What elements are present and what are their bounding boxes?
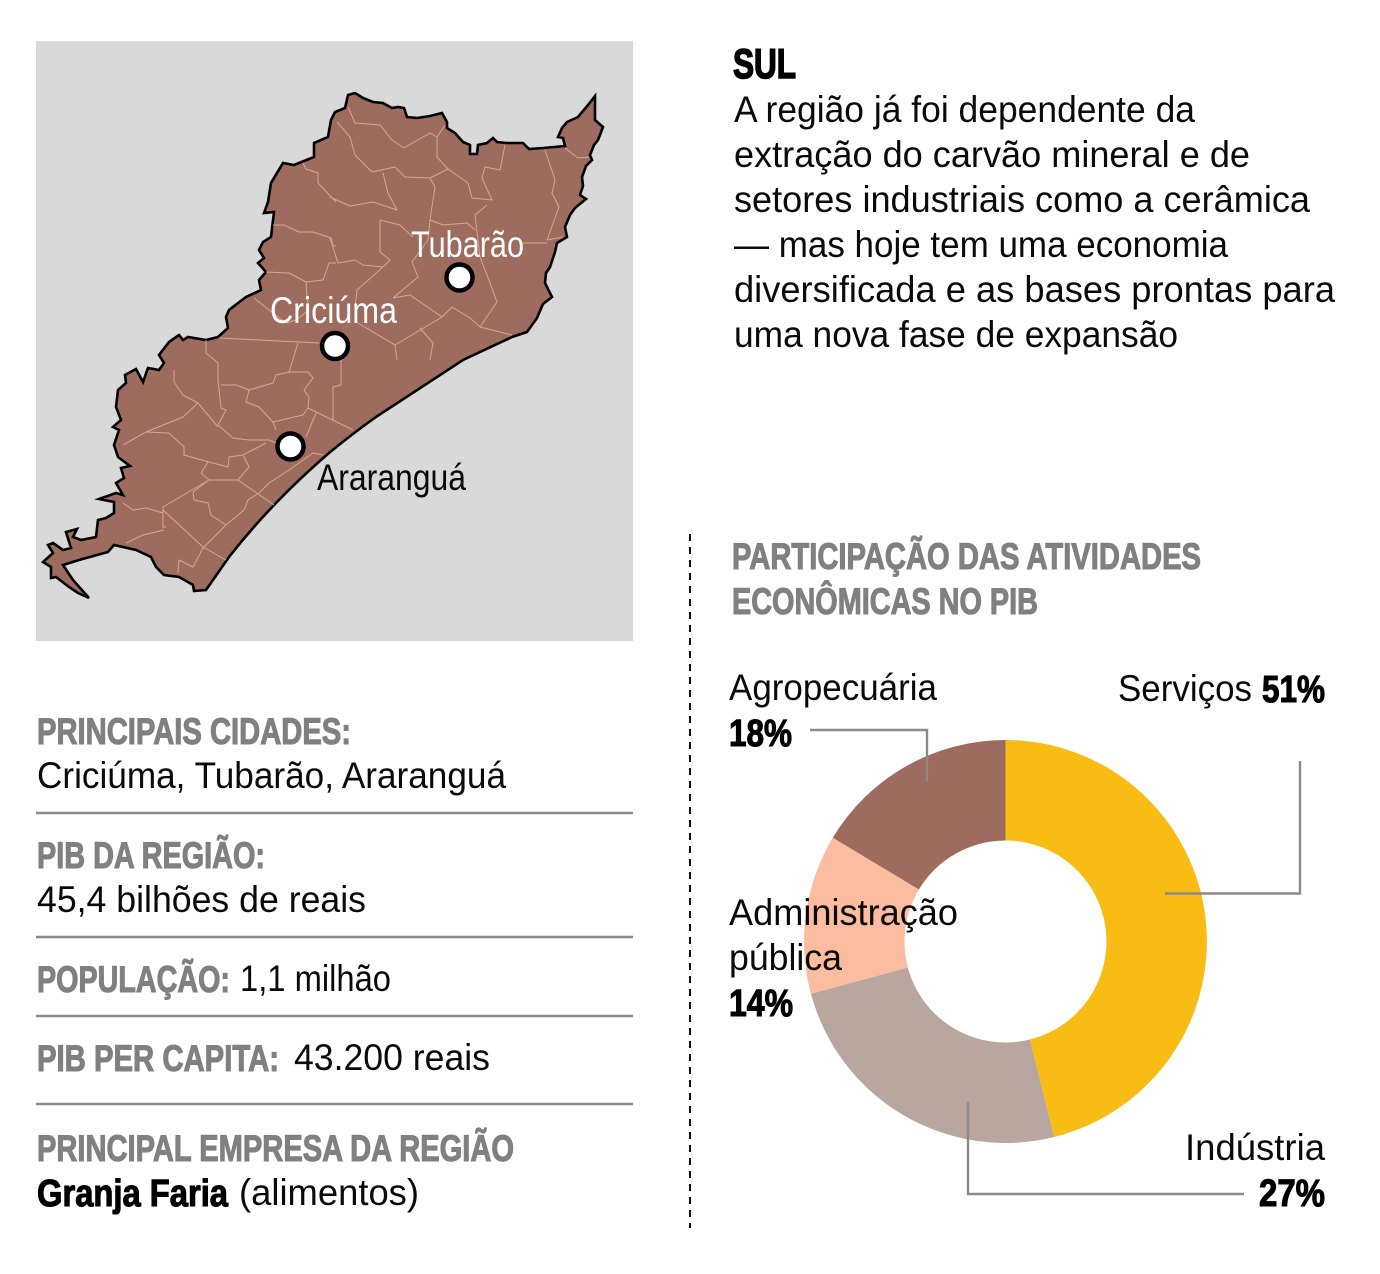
intro text block: extração do carvão mineral e de	[734, 134, 1250, 175]
fact: principais cidades: Criciúma, Tubarão, Araranguá	[37, 755, 506, 796]
segment: Indústria	[811, 968, 1054, 1143]
fact: principal empresa: (alimentos)	[239, 1172, 419, 1213]
marker: Criciúma	[322, 333, 348, 359]
label: Serviços: 51%	[1262, 669, 1325, 711]
fact: principal empresa	[37, 1127, 514, 1215]
segment: Agropecuária	[833, 740, 1006, 890]
fact: PIB da região	[37, 834, 366, 920]
fact: PIB da região: PIB DA REGIÃO:	[37, 834, 265, 876]
fact: principal empresa: PRINCIPAL EMPRESA DA REGIÃO	[37, 1127, 514, 1169]
label: Agropecuária	[729, 667, 937, 755]
fact: população: 1,1 milhão	[240, 958, 391, 999]
fact: principais cidades: PRINCIPAIS CIDADES:	[37, 711, 351, 752]
label: Serviços: Serviços	[1118, 668, 1252, 709]
title: SUL: SUL	[733, 40, 796, 87]
chart heading: PARTICIPAÇÃO DAS ATIVIDADES	[732, 535, 1201, 577]
intro text block: diversificada e as bases prontas para	[734, 269, 1335, 310]
fact: principais cidades	[37, 711, 506, 796]
intro text block: — mas hoje tem uma economia	[734, 224, 1228, 265]
label: Administração pública: pública	[729, 937, 842, 978]
segment: Administração pública	[804, 838, 919, 994]
label: Indústria: Indústria	[1185, 1127, 1325, 1168]
intro text block: setores industriais como a cerâmica	[734, 179, 1310, 220]
label: Administração pública	[729, 892, 958, 1025]
segment: Serviços	[1006, 740, 1207, 1137]
fact: PIB per capita: 43.200 reais	[294, 1037, 490, 1078]
marker: Araranguá	[278, 434, 304, 460]
intro text block: A região já foi dependente da	[734, 89, 1195, 130]
label: Indústria	[1185, 1127, 1325, 1215]
panel: map of the southern region	[36, 41, 633, 641]
fact: PIB da região: 45,4 bilhões de reais	[37, 879, 366, 920]
intro text block	[734, 89, 1335, 355]
fact: PIB per capita	[37, 1037, 490, 1079]
label: Indústria: 27%	[1259, 1173, 1325, 1215]
leader line: Agropecuária	[810, 730, 927, 781]
label: Administração pública: Administração	[729, 892, 958, 933]
map label: Araranguá: Araranguá	[317, 457, 466, 498]
fact: principal empresa: Granja Faria	[37, 1173, 229, 1215]
chart heading	[732, 535, 1201, 622]
fact: população: POPULAÇÃO:	[37, 958, 230, 1000]
label: Agropecuária: 18%	[729, 713, 792, 755]
leader line: Indústria	[968, 1102, 1244, 1194]
label: Agropecuária: Agropecuária	[729, 667, 937, 708]
donut chart	[804, 740, 1207, 1143]
marker: Tubarão	[446, 264, 472, 290]
map label: Criciúma: Criciúma	[270, 290, 397, 331]
fact: PIB per capita: PIB PER CAPITA:	[37, 1038, 279, 1079]
municipal boundaries	[123, 107, 589, 573]
fact: população	[37, 958, 391, 1000]
leader line: Serviços	[1165, 761, 1300, 894]
chart heading: ECONÔMICAS NO PIB	[732, 580, 1038, 622]
label: Administração pública: 14%	[729, 983, 793, 1025]
map region outline	[43, 93, 603, 598]
intro text block: uma nova fase de expansão	[734, 314, 1178, 355]
map label: Tubarão: Tubarão	[411, 224, 524, 265]
label: Serviços	[1118, 668, 1325, 711]
